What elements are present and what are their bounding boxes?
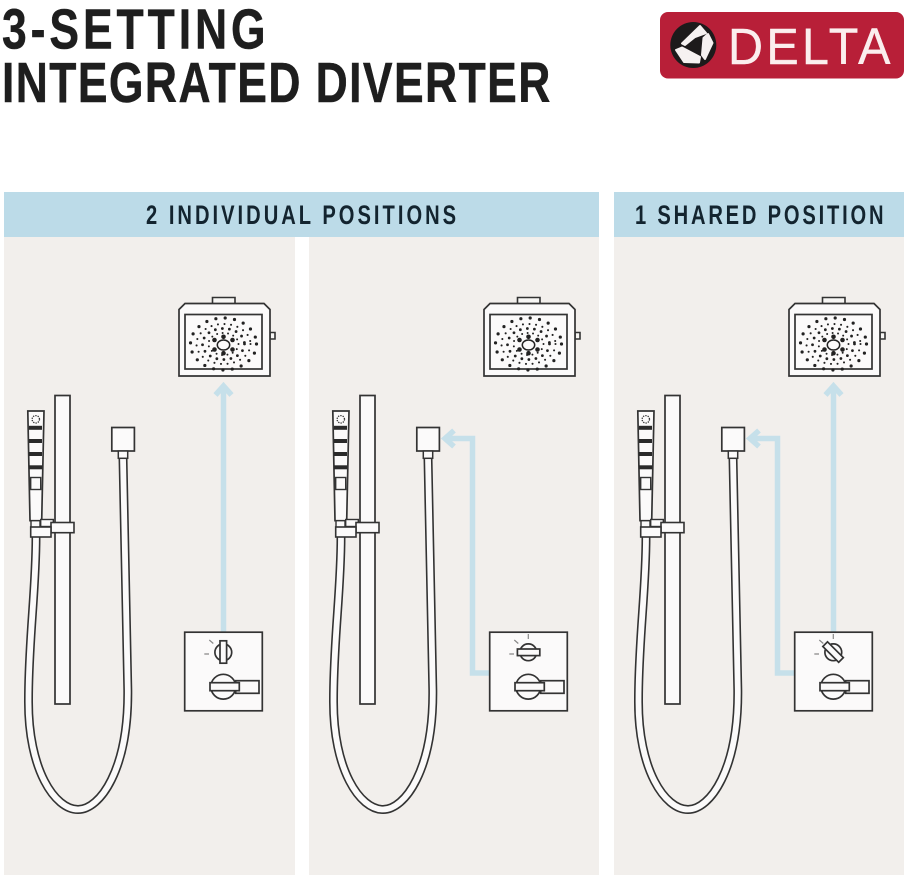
icon: shower head [484, 298, 580, 376]
icon: hand shower with slide bar and hose [333, 396, 439, 810]
diagram: panel 2 [333, 298, 580, 810]
icon: diverter knob, vertical [215, 641, 232, 663]
icon: diverter knob, horizontal [517, 644, 540, 661]
logo: Delta [660, 12, 904, 78]
heading bar: 2 individual positions [4, 192, 599, 237]
title: INTEGRATED DIVERTER [2, 51, 550, 114]
icon: hand shower with slide bar and hose [28, 396, 134, 810]
heading bar: 2 individual positions: 2 INDIVIDUAL POSITIONS [146, 200, 456, 230]
icon: valve plate [795, 632, 872, 711]
arrow: diverter to shower head [826, 386, 842, 632]
arrow: diverter to shower head [216, 386, 232, 632]
icon: diverter knob, diagonal [819, 638, 847, 666]
arrow: diverter to hand shower wall outlet [445, 430, 489, 673]
diagram: panel 1 [28, 298, 275, 810]
diagram: panel 3 [638, 298, 885, 810]
icon: tick mark [832, 634, 834, 639]
heading bar: 1 shared position [614, 192, 904, 237]
icon: hand shower with slide bar and hose [638, 396, 744, 810]
icon: shower head [789, 298, 885, 376]
heading bar: 1 shared position: 1 SHARED POSITION [635, 200, 884, 230]
panel: 2 individual positions, left [4, 237, 295, 875]
panel: 2 individual positions, right [309, 237, 599, 875]
arrow: diverter to hand shower wall outlet [750, 430, 794, 673]
title [2, 0, 550, 114]
icon: valve plate [185, 632, 262, 711]
logo: Delta: DELTA [728, 18, 891, 75]
icon: shower head [179, 298, 275, 376]
icon: tick mark [527, 634, 529, 639]
panel: 1 shared position [614, 237, 904, 875]
icon: valve plate [490, 632, 567, 711]
